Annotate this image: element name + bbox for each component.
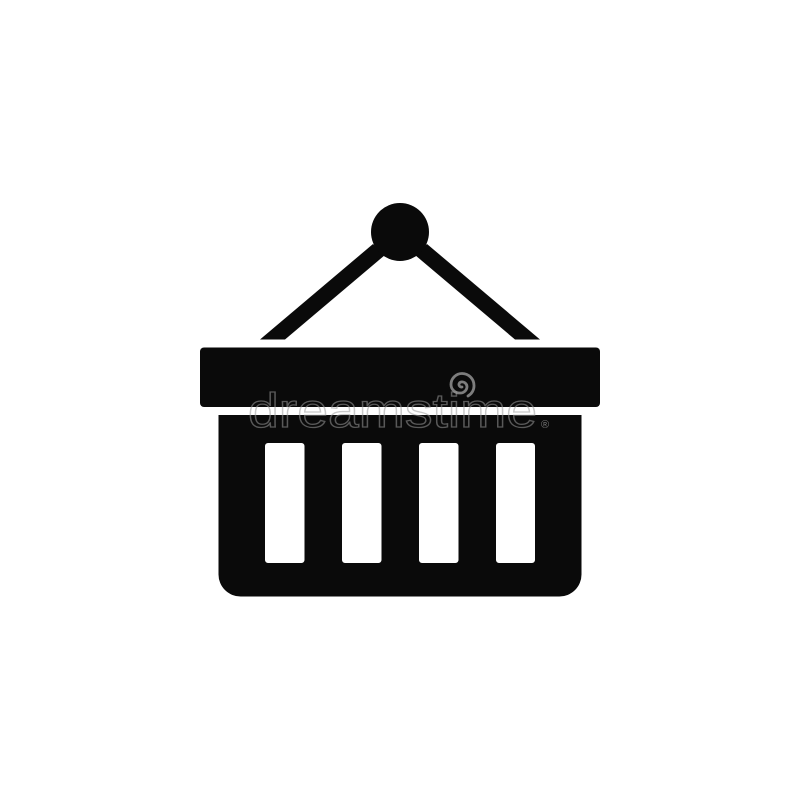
watermark bbox=[248, 374, 549, 438]
watermark wordmark: dreamstime bbox=[248, 385, 537, 438]
watermark spiral logo bbox=[451, 374, 474, 396]
basket handle left strap bbox=[260, 244, 385, 340]
basket handle knob bbox=[371, 203, 429, 261]
icon: shopping basket bbox=[200, 203, 600, 596]
basket body with four slots bbox=[218, 415, 582, 596]
basket handle right strap bbox=[415, 244, 540, 340]
watermark registered mark: ® bbox=[541, 419, 549, 431]
basket rim bbox=[200, 348, 600, 407]
